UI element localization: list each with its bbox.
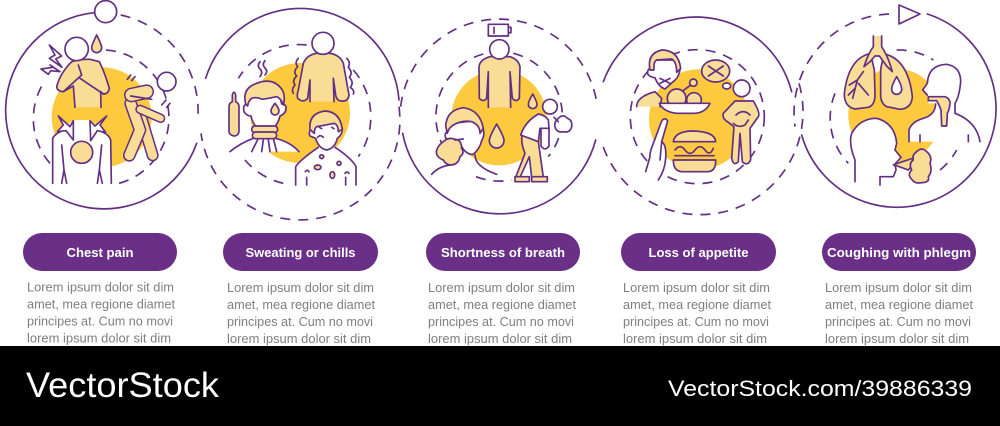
inner dashed ring — [830, 50, 957, 170]
text block: shortness of breath — [428, 281, 577, 346]
icon: refusing hand — [646, 119, 668, 180]
text block: sweating or chills: principes at. Cum no movi — [227, 315, 373, 329]
heading: sweating or chills — [223, 233, 378, 271]
icon: low battery — [488, 24, 511, 36]
icon: shivering person — [292, 32, 354, 102]
text block: shortness of breath: principes at. Cum no movi — [428, 315, 574, 329]
icon: burger — [673, 131, 716, 172]
heading: coughing with phlegm — [822, 233, 976, 271]
text block: loss of appetite: principes at. Cum no movi — [623, 315, 769, 329]
outer ring — [794, 14, 996, 207]
heading: chest pain: Chest pain — [66, 245, 134, 260]
icon: thought bubble with cross — [702, 60, 731, 89]
icon: plate of chicken — [659, 79, 710, 113]
icon: coughing face — [432, 108, 497, 174]
icon: person using inhaler — [909, 64, 980, 142]
text block: shortness of breath: lorem ipsum dolor sit dim — [428, 332, 572, 346]
text block: loss of appetite: amet, mea regione diamet — [623, 298, 772, 312]
text block: chest pain: lorem ipsum dolor sit dim — [27, 332, 171, 346]
text block: coughing with phlegm: lorem ipsum dolor sit dim — [825, 332, 969, 346]
heading: loss of appetite: Loss of appetite — [648, 245, 748, 260]
yellow disc — [649, 69, 749, 169]
yellow disc — [52, 67, 152, 167]
icon: sweat drops — [489, 94, 537, 148]
yellow disc — [451, 70, 547, 165]
heading: chest pain — [23, 233, 177, 271]
icon: back with pain — [53, 116, 111, 183]
yellow disc — [848, 68, 942, 162]
outer ring — [601, 17, 803, 215]
watermark url: VectorStock.com/39886339 — [668, 376, 972, 401]
outer ring — [201, 8, 400, 220]
heading: loss of appetite — [621, 233, 776, 271]
inner dashed ring — [238, 45, 371, 183]
inner dashed ring — [33, 50, 169, 184]
text block: chest pain — [27, 280, 176, 346]
text block: sweating or chills: Lorem ipsum dolor sit dim — [227, 281, 374, 295]
heading: coughing with phlegm: Coughing with phlegm — [827, 245, 971, 260]
icon: man refusing food — [637, 50, 681, 107]
text block: loss of appetite — [623, 281, 772, 346]
heading: shortness of breath — [426, 233, 580, 271]
footer band with watermark — [0, 346, 1000, 426]
text block: sweating or chills: lorem ipsum dolor sit dim — [227, 332, 371, 346]
outer ring — [401, 19, 597, 214]
text block: coughing with phlegm: Lorem ipsum dolor sit dim — [825, 281, 972, 295]
icon: person holding stomach — [723, 80, 759, 164]
icon: child with rash — [296, 111, 356, 185]
panel: loss of appetite illustration — [601, 17, 803, 215]
text block: sweating or chills: amet, mea regione diamet — [227, 298, 376, 312]
start triangle marker — [899, 5, 920, 24]
yellow disc — [250, 63, 350, 163]
text block: chest pain: Lorem ipsum dolor sit dim — [27, 280, 174, 294]
outer progress ring with start marker — [6, 1, 198, 209]
panel: chest pain illustration — [6, 1, 198, 209]
watermark logo: VectorStock — [26, 366, 220, 405]
text block: coughing with phlegm: principes at. Cum no movi — [825, 315, 971, 329]
panel: sweating or chills illustration — [201, 8, 400, 220]
text block: shortness of breath: Lorem ipsum dolor sit dim — [428, 281, 575, 295]
icon: person clutching chest — [41, 35, 109, 107]
icon: lungs — [844, 36, 912, 109]
text block: chest pain: principes at. Cum no movi — [27, 314, 173, 328]
text block: coughing with phlegm — [825, 281, 974, 346]
panel: coughing with phlegm illustration — [794, 5, 996, 207]
icon: person bending over — [515, 99, 572, 182]
icon: person doubled over — [127, 72, 176, 155]
text block: loss of appetite: lorem ipsum dolor sit dim — [623, 332, 767, 346]
text block: chest pain: amet, mea regione diamet — [27, 298, 176, 312]
text block: shortness of breath: amet, mea regione diamet — [428, 298, 577, 312]
inner dashed ring — [630, 50, 764, 184]
icon: fatigued standing person — [479, 40, 520, 107]
icon: coughing person in profile — [851, 118, 931, 185]
text block: sweating or chills — [227, 281, 376, 346]
heading: sweating or chills: Sweating or chills — [246, 245, 356, 260]
heading: shortness of breath: Shortness of breath — [441, 245, 565, 260]
text block: coughing with phlegm: amet, mea regione diamet — [825, 298, 974, 312]
text block: loss of appetite: Lorem ipsum dolor sit dim — [623, 281, 770, 295]
panel: shortness of breath illustration — [401, 19, 597, 214]
icon: person with scarf and fever — [229, 61, 299, 152]
inner dashed ring — [436, 53, 562, 181]
